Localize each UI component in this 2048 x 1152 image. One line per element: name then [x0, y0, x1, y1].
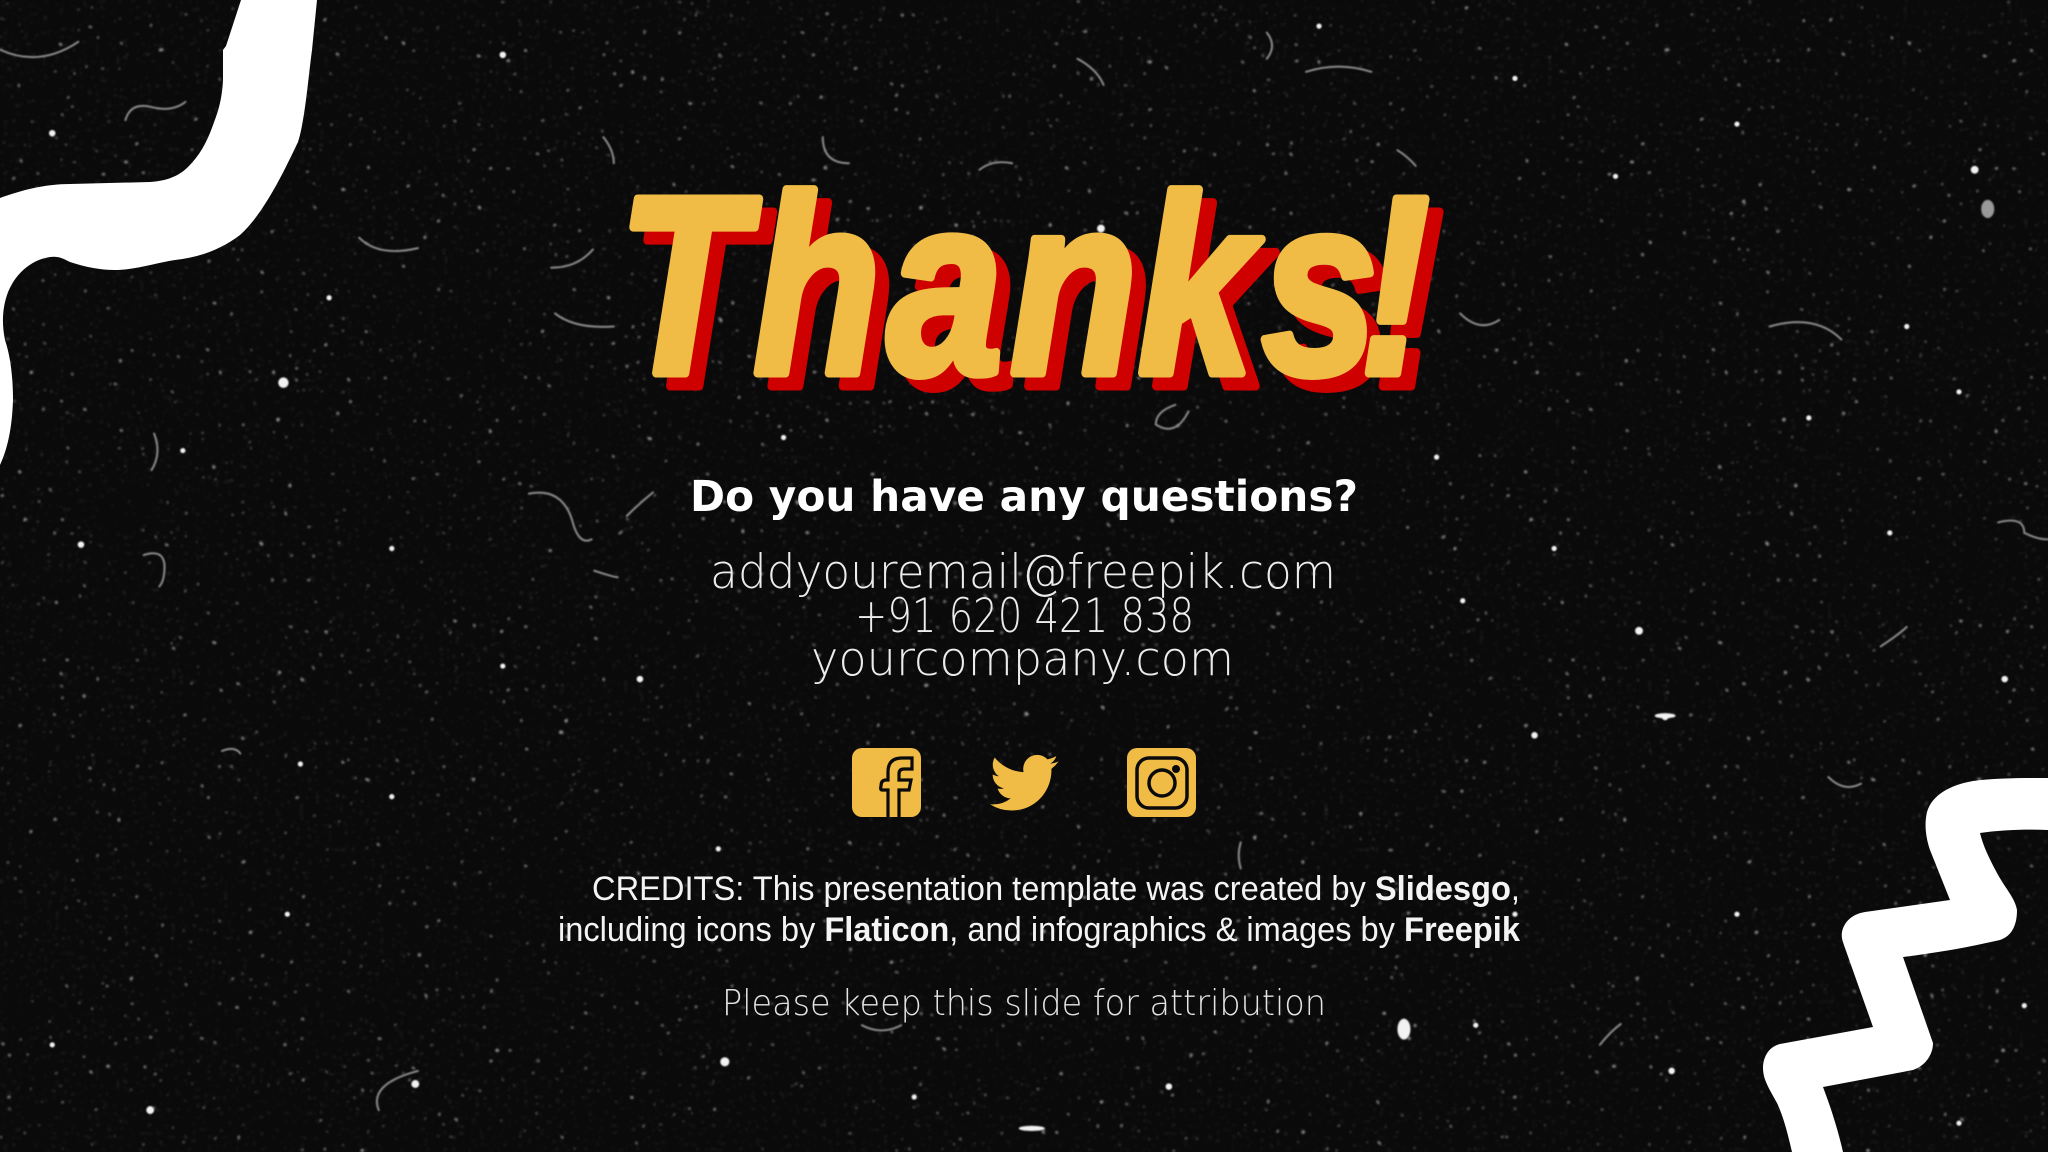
- contact details: [710, 545, 1336, 687]
- attribution note: Please keep this slide for attribution: [722, 983, 1326, 1024]
- decorative white zigzag: bottom right: [1763, 778, 2048, 1152]
- title: Thanks!: Thanks!: [632, 159, 1443, 441]
- contact details: addyouremail@freepik.com: [710, 545, 1336, 600]
- decorative white ribbon: top left: [0, 0, 317, 465]
- icon: twitter: [990, 755, 1058, 810]
- icon: facebook: [852, 748, 921, 817]
- heading: questions: Do you have any questions?: [690, 472, 1358, 522]
- credits: including icons by Flaticon, and infographics & images by Freepik: [558, 911, 1520, 949]
- icon: instagram: [1127, 748, 1196, 817]
- contact details: +91 620 421 838: [855, 589, 1194, 644]
- credits: [558, 870, 1520, 949]
- credits: CREDITS: This presentation template was created by Slidesgo,: [592, 870, 1520, 908]
- title: Thanks!: Thanks!: [618, 146, 1429, 428]
- contact details: yourcompany.com: [811, 632, 1234, 687]
